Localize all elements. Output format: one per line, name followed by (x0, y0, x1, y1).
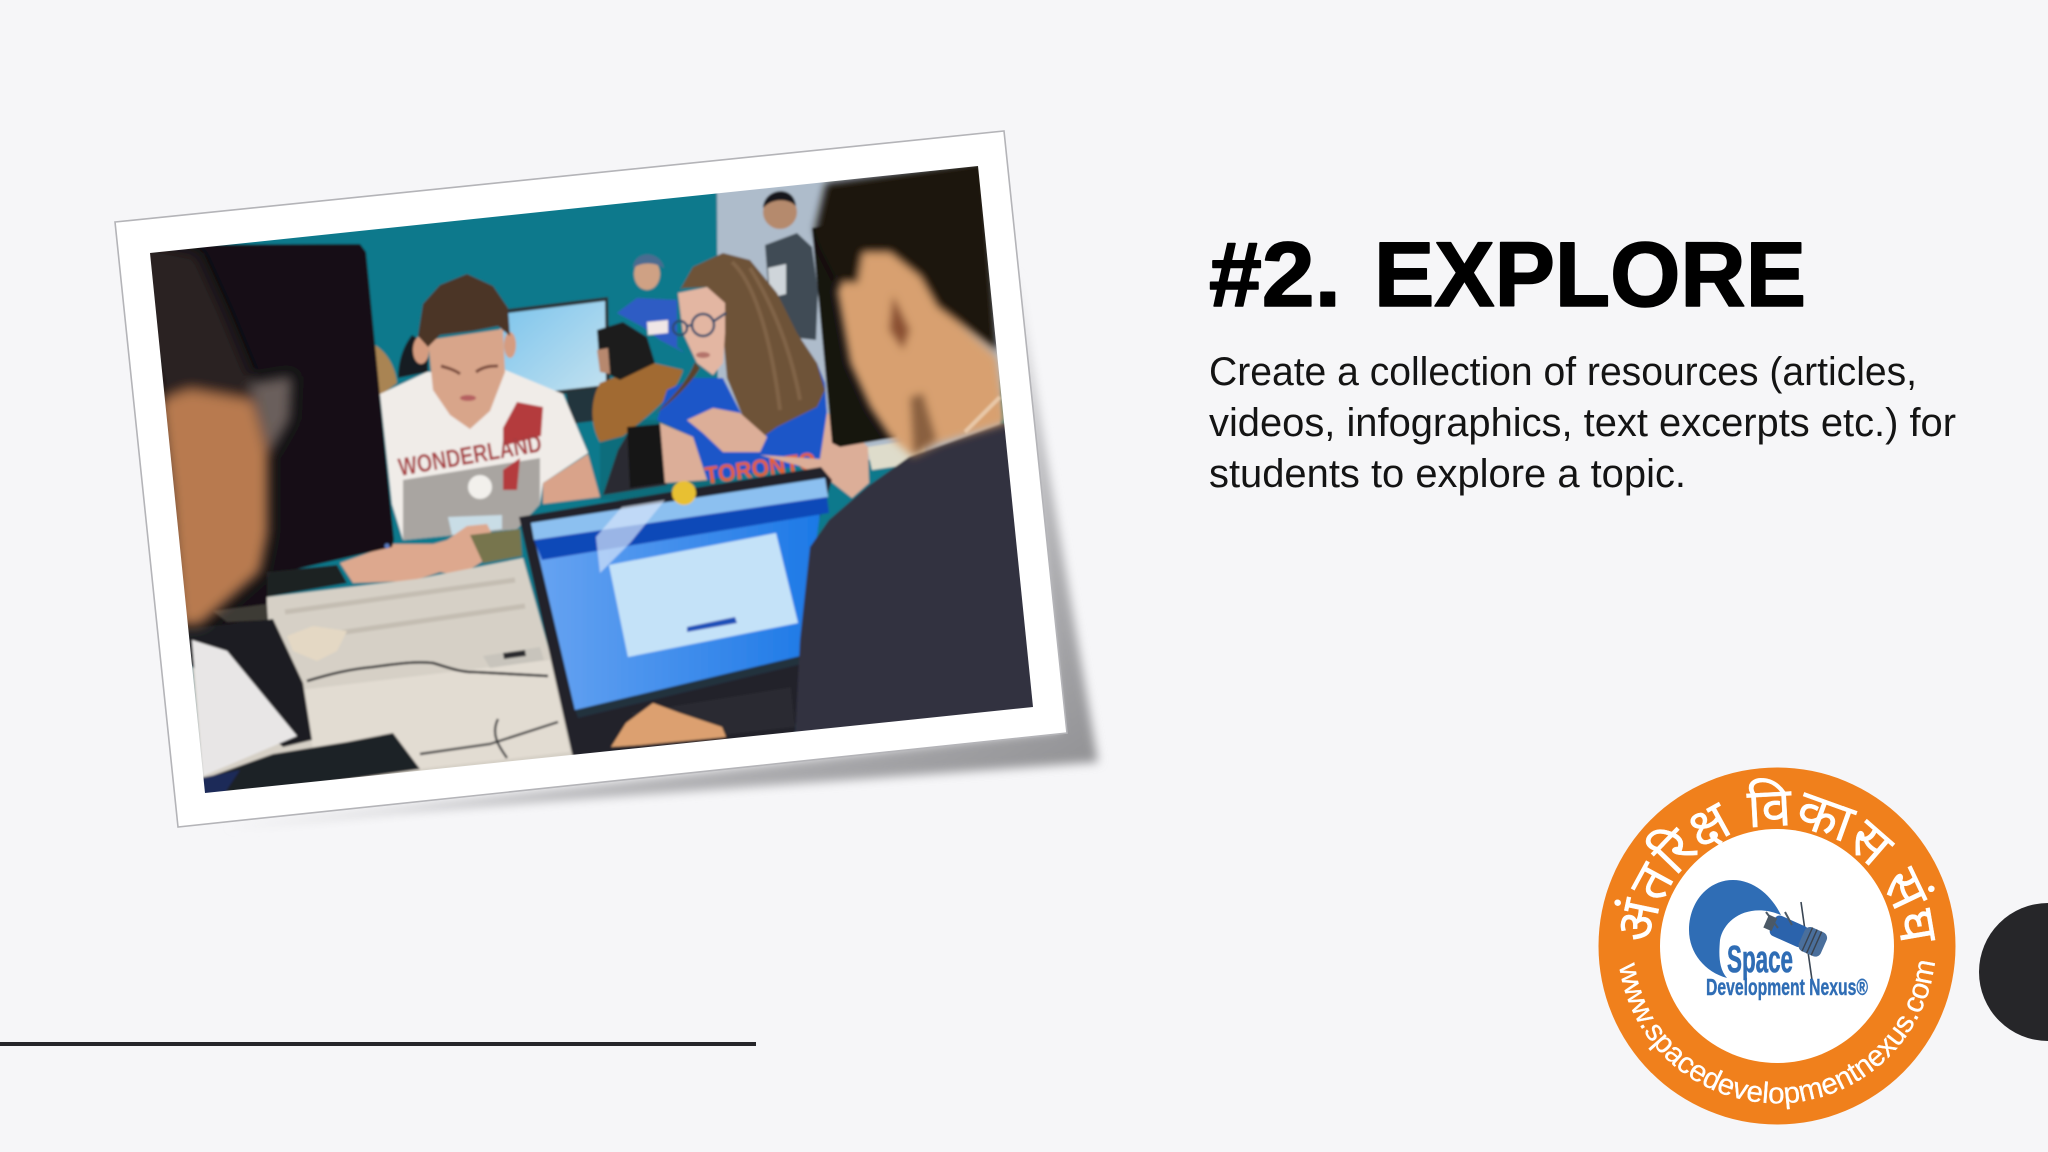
dark semicircle (1979, 903, 2048, 1041)
standing man (763, 191, 818, 340)
girl in blue shirt (655, 253, 869, 498)
shirt lettering: TORONTO (703, 448, 818, 490)
body text: Create a collection of resources (articles, (1209, 350, 1917, 394)
people behind boy (372, 335, 428, 396)
orange ring (1598, 768, 1956, 1124)
logo wordmark space: Space (1727, 939, 1793, 981)
photo card shadow (225, 270, 1098, 828)
title: #2. (1209, 224, 1341, 326)
white centre (1660, 829, 1894, 1063)
left student (130, 240, 292, 625)
hindi ring text: अंतरिक्ष विकास संघ (1614, 778, 1936, 941)
left monitor (140, 244, 394, 640)
body text: students to explore a topic. (1209, 452, 1686, 496)
wall screen (500, 297, 610, 424)
printer, paper and keyboard (185, 604, 420, 800)
satellite (1761, 902, 1829, 980)
box, device and cables on table (287, 626, 558, 758)
title: EXPLORE (1374, 224, 1806, 326)
table (192, 556, 574, 780)
right student (795, 160, 1045, 740)
laptop (519, 467, 832, 758)
photo card (115, 131, 1098, 828)
logo badge (1598, 768, 1956, 1124)
standing woman (617, 254, 685, 353)
shirt lettering: WONDERLAND (396, 429, 544, 482)
logo wordmark development nexus: Development Nexus® (1706, 974, 1868, 1000)
classroom photo (150, 166, 1033, 793)
body text: videos, infographics, text excerpts etc.) for (1209, 401, 1956, 445)
seated woman background (592, 322, 683, 495)
bottom rule (0, 1042, 756, 1046)
website ring text: www.spacedevelopmentnexus.com (1620, 961, 1936, 1110)
blue crescent (1689, 880, 1781, 978)
white photo frame (115, 131, 1067, 827)
body text (1209, 350, 1956, 496)
boy in white shirt (340, 274, 600, 583)
